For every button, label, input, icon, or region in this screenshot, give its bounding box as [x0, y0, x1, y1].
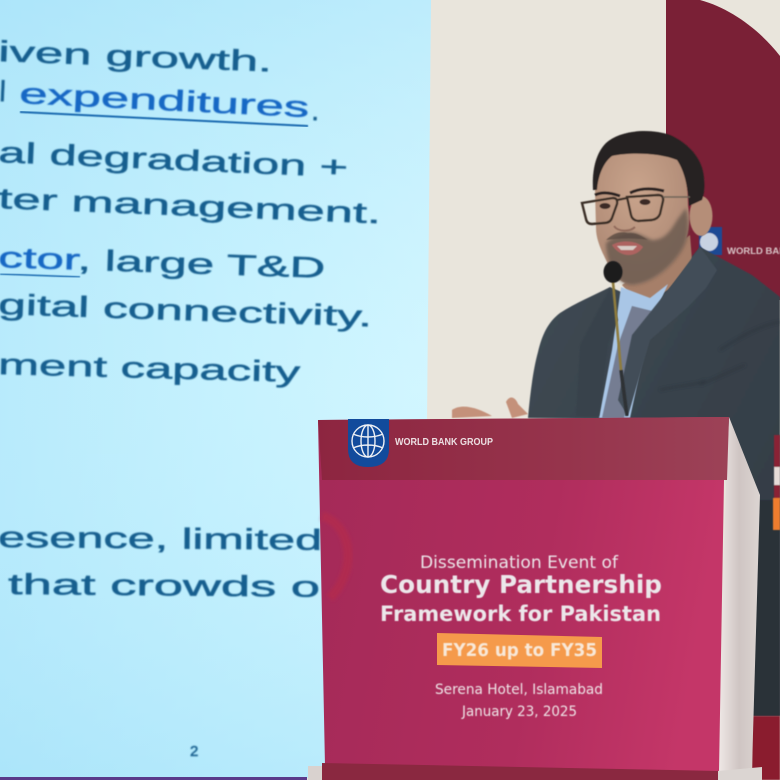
right-hand backdrop fragments [752, 435, 780, 780]
screen text: . [311, 95, 320, 127]
head [582, 131, 712, 285]
screen text: iven growth. [0, 36, 273, 79]
icon: glasses [582, 195, 690, 224]
moustache [606, 232, 648, 240]
podium front [318, 417, 729, 772]
screen text: gital connectivity. [0, 289, 373, 333]
background wall [425, 0, 780, 780]
speaker [452, 131, 780, 716]
logo wordmark: WORLD BANK GROUP [395, 437, 493, 448]
icon: right hand [506, 398, 528, 418]
hair [593, 131, 704, 206]
decorative arc [322, 516, 348, 598]
icon: microphone [604, 261, 627, 416]
panel: projection screen [0, 0, 431, 780]
date badge [437, 633, 602, 668]
screen text: ter management. [0, 183, 382, 230]
venue and date: Serena Hotel, Islamabad [435, 682, 603, 698]
screen text: that crowds o [8, 569, 320, 604]
screen text [0, 36, 382, 760]
screen text: expenditures [19, 78, 310, 124]
jacket lapels [618, 247, 717, 416]
ear [690, 196, 712, 236]
podium side [718, 417, 760, 772]
nose shadow [614, 226, 635, 231]
icon: blurred banner logo [699, 227, 722, 255]
podium top band [318, 417, 729, 480]
neck [622, 235, 692, 305]
venue and date [435, 682, 603, 720]
podium headline block: Framework for Pakistan [380, 602, 661, 626]
panel: podium [308, 417, 762, 780]
shirt [599, 284, 668, 418]
screen text: ctor , large T&D [0, 242, 326, 285]
icon: left hand [452, 407, 492, 418]
jacket lower right shade [752, 500, 780, 716]
suit fold lines [660, 322, 780, 390]
podium base [308, 763, 762, 780]
podium headline block: Dissemination Event of [420, 553, 619, 572]
screen text: al degradation + [0, 137, 349, 184]
screen text: ment capacity [0, 349, 301, 389]
eyes [600, 203, 610, 209]
beard [606, 208, 688, 285]
podium headline block [380, 553, 662, 626]
suit jacket [528, 247, 780, 716]
left lapel [576, 288, 618, 416]
wall banner: crimson panel with logo [666, 0, 780, 300]
tie [602, 306, 652, 418]
icon: World Bank shield logo [348, 419, 389, 467]
date badge: FY26 up to FY35 [442, 640, 597, 661]
face [595, 150, 689, 285]
screen text: 2 [190, 743, 198, 760]
screen text: esence, limited [0, 522, 322, 557]
mouth [612, 241, 643, 255]
podium headline block: Country Partnership [380, 570, 662, 599]
venue and date: January 23, 2025 [461, 704, 577, 720]
eyebrows [595, 189, 664, 196]
